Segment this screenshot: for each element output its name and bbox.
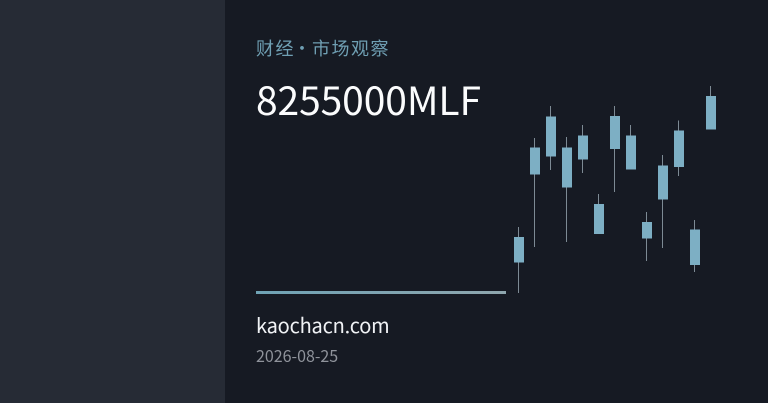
heading: category label: 市场观察 bbox=[312, 35, 390, 61]
title: 8255000MLF bbox=[256, 71, 481, 127]
accent line bbox=[256, 291, 506, 294]
site name: kaochacn.com bbox=[256, 310, 389, 339]
panel: left sidebar bbox=[0, 0, 225, 403]
heading: category label bbox=[256, 35, 390, 61]
heading: category label: · bbox=[293, 35, 312, 61]
date: 2026-08-25 bbox=[256, 343, 338, 367]
heading: category label: 财经 bbox=[256, 35, 295, 61]
